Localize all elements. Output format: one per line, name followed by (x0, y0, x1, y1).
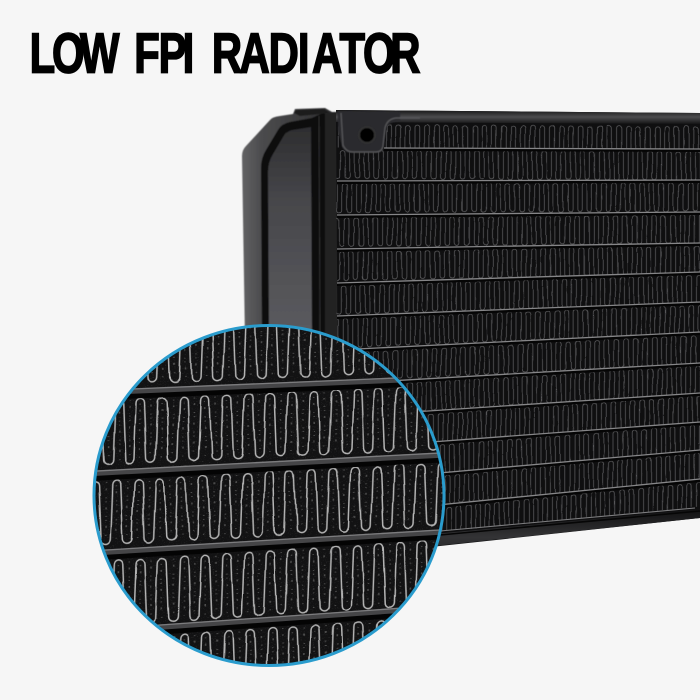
radiator end cap (242, 108, 342, 340)
lens background (94, 326, 444, 666)
magnified fins and rails (96, 327, 442, 664)
title: LOW FPI RADIATOR (30, 21, 420, 84)
lens blue ring (94, 326, 444, 666)
radiator core base (336, 110, 700, 556)
mounting screw hole (358, 126, 376, 144)
radiator product photo (242, 108, 700, 556)
magnifier lens (92, 324, 446, 667)
mounting plate (338, 111, 420, 153)
fin rows (337, 122, 700, 541)
horizontal rails (337, 148, 700, 515)
bottom frame (337, 508, 700, 556)
rail shadows (337, 150, 700, 516)
top frame (336, 110, 700, 124)
